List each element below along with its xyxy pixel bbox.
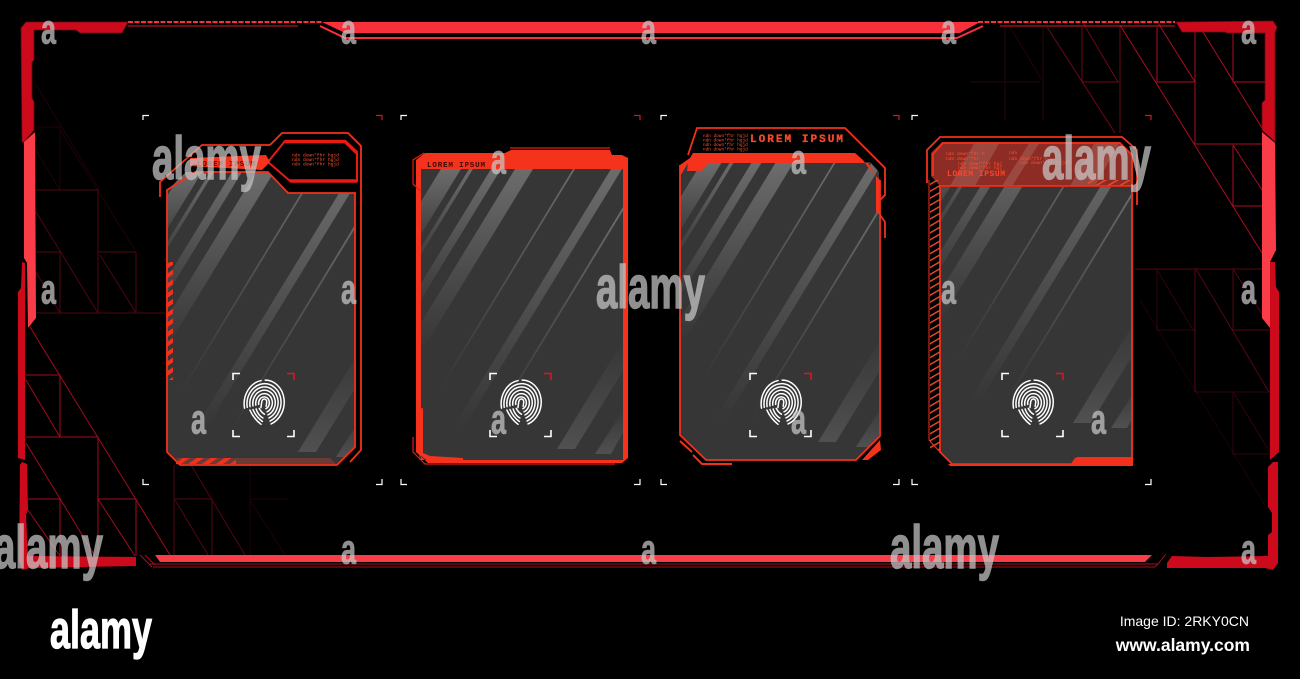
panel 4 left hatching — [929, 180, 940, 452]
watermarks small: a — [641, 6, 656, 52]
panel 2 red frame — [416, 150, 628, 463]
panel 4 hatch — [1088, 180, 1133, 186]
frame: right bright bar — [1262, 132, 1276, 328]
watermarks small: a — [41, 6, 56, 52]
panel 1 small text: ndn down*fhr hgjd — [292, 162, 339, 168]
frame: left lower bar — [18, 262, 25, 460]
panel 3 glass — [666, 162, 885, 460]
panel 4 outlines — [927, 137, 1137, 464]
panel 4 small text: ndn down*fhr hgj — [958, 165, 1002, 171]
panel 2 top lines — [413, 148, 615, 464]
panel 4 header streaks — [950, 142, 1120, 186]
panel 1 fingerprint — [241, 378, 287, 427]
watermarks small: a — [1091, 396, 1106, 442]
frame: bottom left corner — [19, 462, 136, 570]
panel 3 lower accents — [680, 440, 881, 464]
watermarks small: a — [341, 6, 356, 52]
watermarks small: a — [341, 266, 356, 312]
watermarks large: alamy — [596, 254, 705, 321]
watermarks small: a — [791, 136, 806, 182]
image id: Image ID: 2RKY0CN — [1120, 613, 1249, 629]
background grid: top right — [970, 23, 1265, 253]
watermarks small: a — [941, 6, 956, 52]
panel 4 label: LOREM IPSUM — [947, 170, 1005, 179]
frame: right lower bar — [1270, 262, 1279, 460]
panel 1 small text: ndn down*fhr hgjd — [292, 152, 339, 158]
watermarks small: a — [641, 526, 656, 572]
panel 1 hazard stripes — [166, 262, 336, 464]
watermarks small: a — [1241, 6, 1256, 52]
watermarks small: a — [1241, 266, 1256, 312]
panel 4 small text: ndn — [1009, 150, 1018, 156]
panel 1 label bar: LOREM IPSUM — [197, 161, 255, 169]
panel 4 small text: ndn down*fhr hgj — [958, 161, 1002, 167]
panel 2 label: LOREM IPSUM — [427, 162, 485, 170]
frame: bottom right corner — [1167, 462, 1278, 570]
watermarks large: alamy — [152, 125, 261, 192]
website: www.alamy.com — [1115, 635, 1250, 655]
panel 1 glass — [168, 172, 354, 464]
panel 3 top band — [680, 153, 880, 215]
scanner brackets — [233, 374, 1063, 436]
panel 3 fingerprint — [758, 378, 804, 427]
panel 3 — [666, 128, 885, 464]
watermarks small: a — [491, 136, 506, 182]
frame: bottom center bar — [140, 554, 1166, 567]
watermarks small — [41, 6, 1256, 572]
panel 4 fingerprint — [1010, 378, 1056, 427]
watermarks small: a — [191, 396, 206, 442]
panel 1 small text: ndn down*fhr hgjd — [292, 157, 339, 163]
watermarks small: a — [341, 526, 356, 572]
watermarks large: alamy — [890, 514, 999, 581]
corner brackets — [143, 116, 1151, 484]
panel 2 glass — [405, 169, 624, 460]
panel 1 outlines — [160, 133, 361, 465]
panel 3 outlines — [680, 128, 885, 460]
background grid: lower left — [26, 327, 288, 556]
panel 3 title: LOREM IPSUM — [750, 134, 843, 146]
panel 2 — [405, 148, 628, 464]
watermarks large — [0, 125, 1151, 581]
panel 4 small text: ndn down*fhr hgjdf — [1020, 160, 1070, 166]
watermarks small: a — [491, 396, 506, 442]
panel 4 small text: ndn down*fhr h — [946, 151, 985, 157]
panel 3 tag — [687, 162, 710, 171]
panel 3 small text: ndn down*fhr hgjd — [703, 134, 748, 139]
frame: left bright bar — [24, 132, 36, 328]
watermarks small: a — [941, 266, 956, 312]
frame: top left corner — [21, 22, 128, 142]
panel 4 glass — [940, 187, 1133, 463]
watermarks small: a — [41, 266, 56, 312]
panel 3 small text: ndn down*fhr hgjd — [703, 138, 748, 144]
panel 3 small text: ndn down*fhr hgjd — [703, 148, 748, 152]
panel 1 label bar — [190, 155, 270, 170]
panel 4 small text: ndn down*fhr — [946, 156, 979, 162]
panel 2 fingerprint — [498, 378, 544, 427]
panel 4 small text: ndn down*fhr h — [1009, 156, 1048, 162]
panel 4 header — [931, 142, 1133, 186]
panel 2 thick bottom corner — [416, 408, 463, 461]
background grid: middle and lower right — [1135, 269, 1270, 505]
frame: top center bar — [128, 22, 1175, 38]
watermarks small: a — [1241, 526, 1256, 572]
panel 4 — [921, 137, 1140, 467]
watermarks small: a — [791, 396, 806, 442]
panel 1 dark info box — [268, 141, 357, 181]
panel 1 — [146, 133, 365, 465]
background grid: left — [36, 85, 165, 313]
panel 4 bottom band — [948, 457, 1133, 466]
frame: top right corner — [1176, 21, 1277, 142]
watermarks large: alamy — [1042, 125, 1151, 192]
logo: alamy — [50, 600, 152, 660]
panel 3 small text: ndn down*fhr hgjd — [703, 143, 748, 148]
